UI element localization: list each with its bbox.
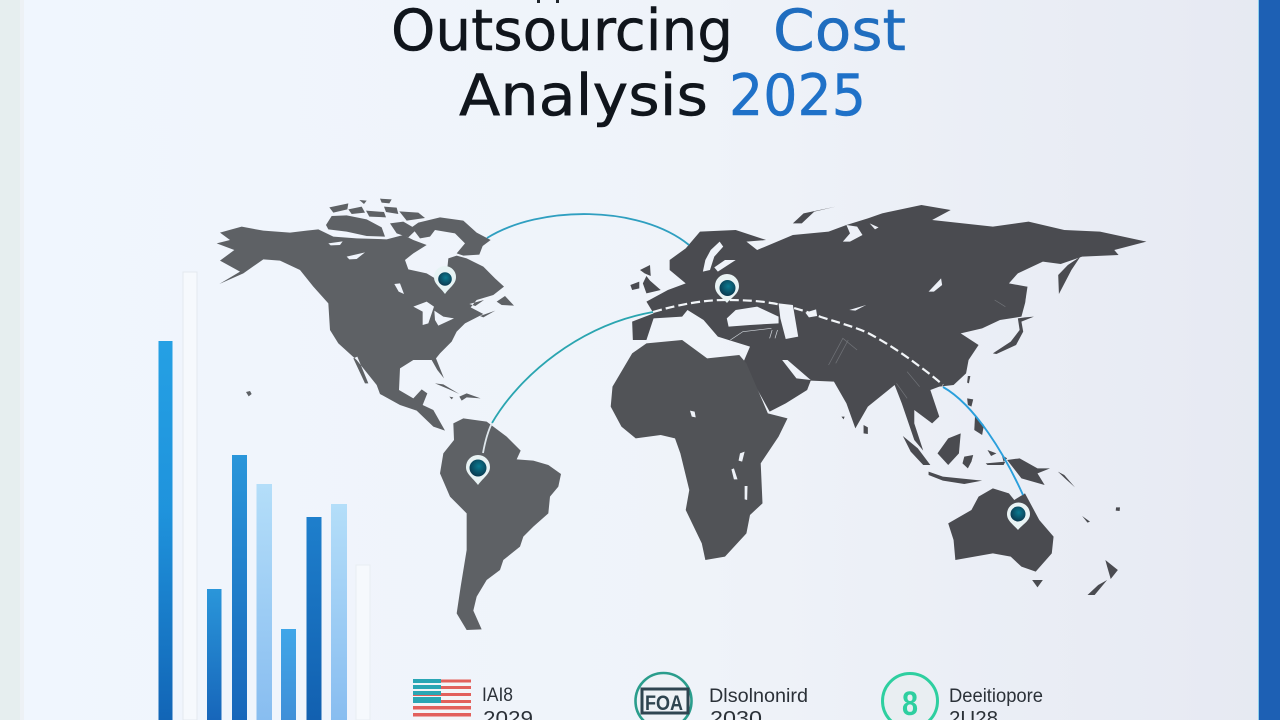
legend item: dollar	[882, 674, 1043, 720]
legend item: currency note	[636, 673, 808, 720]
route arc: south america to europe	[483, 312, 653, 453]
label: currency item: Dlsolnonird	[709, 686, 808, 707]
icon: flag	[413, 679, 471, 720]
right accent bar	[1259, 0, 1280, 720]
world map	[217, 199, 1146, 630]
route arc: asia to australia	[943, 387, 1023, 495]
label: dollar item: Deeitiopore	[949, 686, 1043, 707]
americas	[217, 199, 561, 630]
map pin: australia	[1007, 502, 1030, 530]
icon: banknote in ring: FOA	[645, 692, 683, 715]
title	[391, 0, 906, 129]
map pin: north america	[434, 266, 456, 294]
label: flag item: IAI8	[482, 685, 513, 706]
label: currency item	[709, 686, 808, 720]
bar chart	[158, 272, 370, 720]
icon: banknote in ring	[636, 673, 692, 720]
legend item: flag	[413, 679, 533, 720]
title: 2025	[729, 63, 866, 129]
south america	[440, 418, 561, 630]
icon: green coin	[882, 674, 938, 720]
map pin: south america	[466, 455, 490, 485]
dashed route across eurasia	[653, 300, 943, 385]
label: dollar item	[949, 686, 1043, 720]
title: Analysis	[459, 63, 708, 129]
label: flag item	[482, 685, 533, 720]
route arc: north america to europe	[487, 214, 689, 245]
map pin: europe	[715, 274, 739, 303]
europe asia africa oceania	[611, 205, 1146, 595]
